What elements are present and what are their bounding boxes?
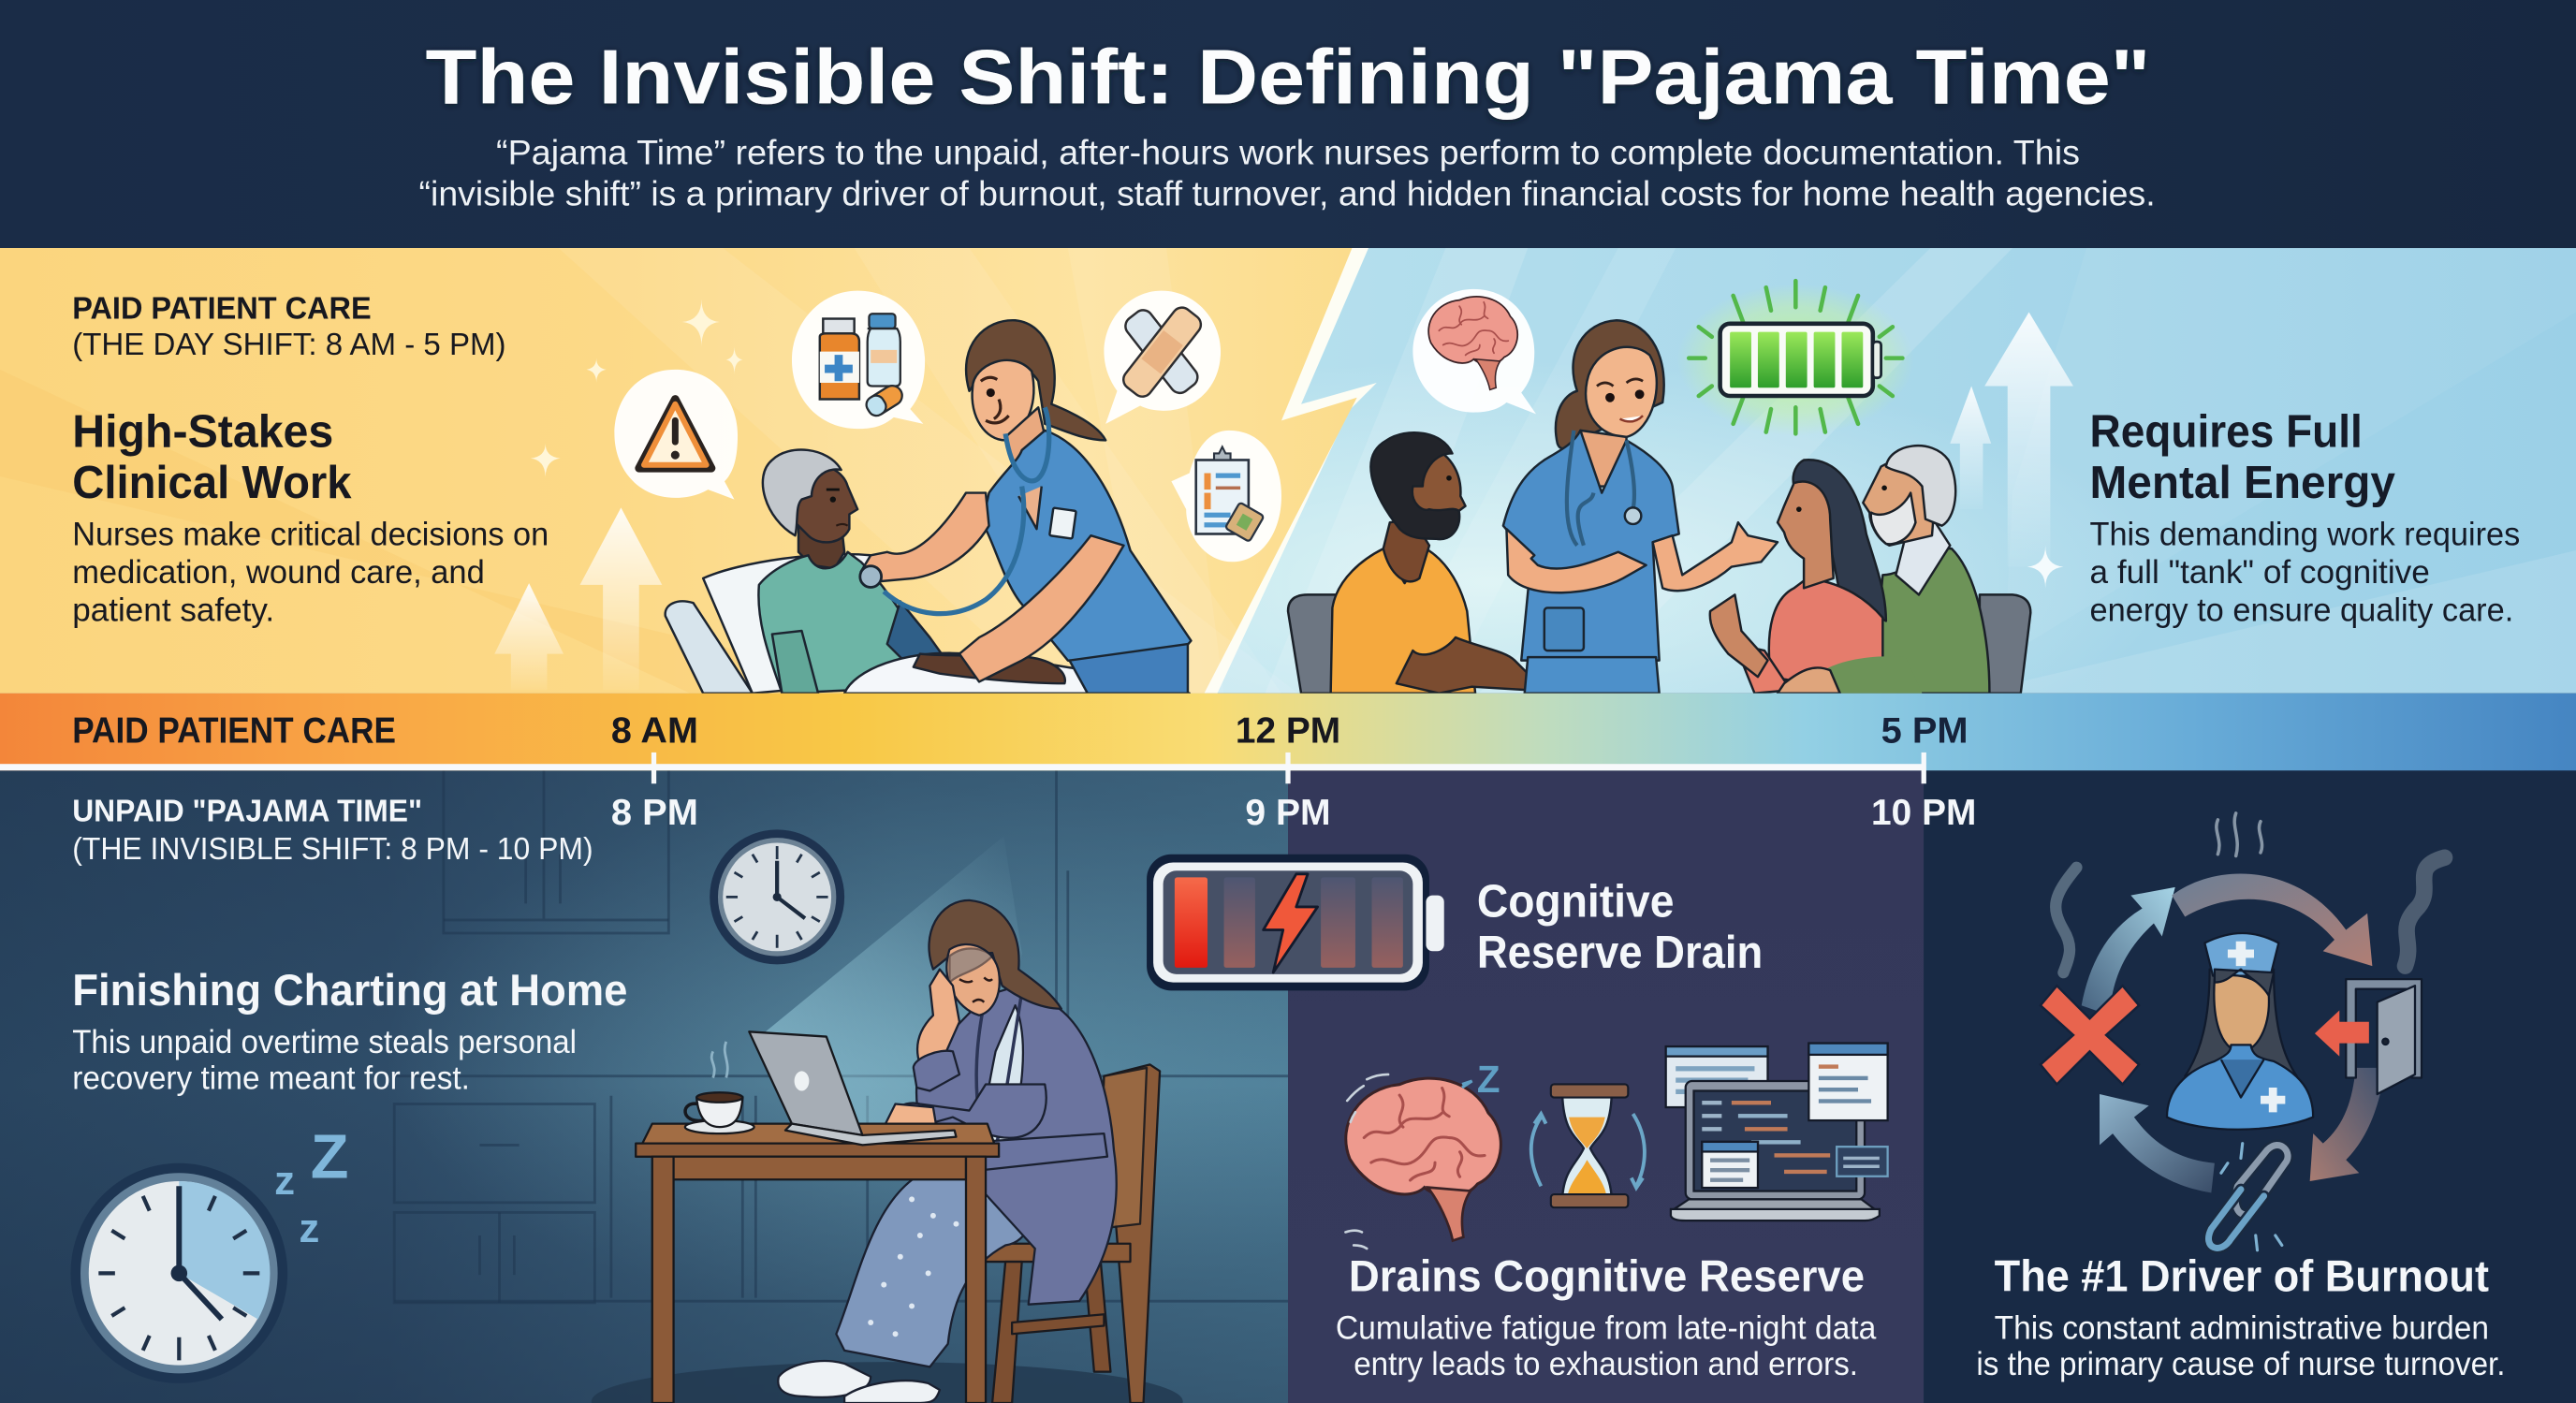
icon: sparkle on blue xyxy=(2027,546,2063,588)
text: high-stakes clinical work: medication, wound care, and xyxy=(72,554,485,591)
text: high-stakes clinical work: Clinical Work xyxy=(72,458,352,508)
text: the number one driver of burnout xyxy=(1976,1252,2506,1382)
timeline labels: night times: 8 PM xyxy=(611,793,698,833)
header panel xyxy=(0,0,2576,248)
text: paid patient care heading: (THE DAY SHIFT: 8 AM - 5 PM) xyxy=(72,328,506,362)
icon: tired brain xyxy=(1345,1058,1500,1249)
text: unpaid pajama time heading xyxy=(72,795,593,867)
text: requires full mental energy: This demanding work requires xyxy=(2089,517,2520,553)
text: requires full mental energy xyxy=(2089,406,2520,628)
text: unpaid pajama time heading: UNPAID "PAJAMA TIME" xyxy=(72,795,422,829)
icon: broken chain xyxy=(2208,1144,2288,1250)
text: high-stakes clinical work: Nurses make critical decisions on xyxy=(72,517,549,553)
icon: full battery with rays xyxy=(1677,281,1914,435)
icon: zzz xyxy=(274,1123,348,1251)
panel: day shift background blue xyxy=(0,248,2576,694)
text: requires full mental energy: a full "tank" of cognitive xyxy=(2089,554,2430,591)
text: paid patient care heading xyxy=(72,292,506,362)
icon: laptop with charting windows xyxy=(1666,1044,1888,1220)
text: cognitive reserve drain xyxy=(1477,876,1763,978)
text: the number one driver of burnout: is the primary cause of nurse turnover. xyxy=(1976,1346,2506,1382)
text: cognitive reserve drain: Reserve Drain xyxy=(1477,928,1763,978)
text: requires full mental energy: Mental Energy xyxy=(2089,458,2396,508)
subtitle xyxy=(419,134,2156,212)
icon: bandage bubble xyxy=(1104,291,1221,424)
icon: sparkles on yellow xyxy=(531,299,742,478)
icon: warning bubble xyxy=(614,370,738,500)
icon: wall clock xyxy=(710,829,844,964)
panel: home night scene xyxy=(0,766,1288,1403)
title: The Invisible Shift: Defining "Pajama Time" xyxy=(426,35,2150,121)
text: the number one driver of burnout: The #1 Driver of Burnout xyxy=(1995,1252,2489,1302)
text: high-stakes clinical work xyxy=(72,406,549,628)
icon: nurse with cap xyxy=(2167,933,2313,1130)
text: drains cognitive reserve: Cumulative fatigue from late-night data xyxy=(1336,1310,1877,1347)
text: finishing charting at home: Finishing Charting at Home xyxy=(72,966,627,1016)
text: cognitive reserve drain: Cognitive xyxy=(1477,876,1674,927)
timeline labels: night times: 9 PM xyxy=(1245,793,1331,833)
text: requires full mental energy: Requires Full xyxy=(2089,406,2363,457)
illustration: nurse speaking xyxy=(1503,320,1778,694)
timeline bar: 8 AM xyxy=(611,710,698,751)
text: unpaid pajama time heading: (THE INVISIBLE SHIFT: 8 PM - 10 PM) xyxy=(72,832,593,867)
timeline bar xyxy=(0,694,2576,783)
timeline bar: 5 PM xyxy=(1881,710,1969,751)
text: finishing charting at home: recovery time meant for rest. xyxy=(72,1060,470,1097)
icon: up arrows on yellow xyxy=(494,507,662,690)
icon: sleep clock xyxy=(70,1163,287,1383)
timeline bar: PAID PATIENT CARE xyxy=(72,710,396,751)
text: high-stakes clinical work: patient safety. xyxy=(72,592,274,628)
illustration: laptop light cone xyxy=(766,836,1022,1133)
illustration: woman at laptop in robe xyxy=(778,900,1117,1403)
icon: tired brain: Z xyxy=(1477,1058,1500,1101)
subtitle: “invisible shift” is a primary driver of burnout, staff turnover, and hidden financial costs for home health agencies. xyxy=(419,174,2156,212)
text: paid patient care heading: PAID PATIENT CARE xyxy=(72,292,372,327)
text: drains cognitive reserve: Drains Cognitive Reserve xyxy=(1349,1252,1865,1302)
icon: red x xyxy=(2041,986,2139,1084)
text: requires full mental energy: energy to ensure quality care. xyxy=(2089,592,2513,628)
text: the number one driver of burnout: This constant administrative burden xyxy=(1995,1310,2489,1347)
timeline bar: 12 PM xyxy=(1236,710,1340,751)
icon: clipboard bubble xyxy=(1171,431,1281,562)
panel: burnout right column xyxy=(1924,766,2576,1403)
icon: low battery xyxy=(1147,855,1444,990)
icon: zzz: Z xyxy=(311,1123,348,1192)
illustration: wooden chair xyxy=(986,1064,1160,1403)
text: high-stakes clinical work: High-Stakes xyxy=(72,406,333,457)
timeline labels: night times: 10 PM xyxy=(1871,793,1976,833)
text: drains cognitive reserve xyxy=(1336,1252,1877,1382)
illustration: seated family couple xyxy=(1710,446,2030,694)
icon: burnout cycle arrows xyxy=(2082,873,2385,1192)
text: finishing charting at home: This unpaid overtime steals personal xyxy=(72,1024,577,1060)
text: finishing charting at home xyxy=(72,966,627,1097)
text: drains cognitive reserve: entry leads to exhaustion and errors. xyxy=(1354,1346,1858,1382)
illustration: hospital bed and patient xyxy=(666,450,1190,694)
illustration: table with laptop and coffee xyxy=(636,1031,999,1403)
icon: brain bubble xyxy=(1412,289,1536,414)
icon: zzz: z xyxy=(299,1206,319,1251)
illustration: seated man in yellow shirt xyxy=(1288,432,1534,694)
subtitle: “Pajama Time” refers to the unpaid, after-hours work nurses perform to complete documentation. This xyxy=(496,134,2080,172)
icon: hourglass xyxy=(1531,1084,1645,1207)
icon: exit door with red arrow xyxy=(2315,979,2422,1094)
icon: zzz: z xyxy=(274,1158,295,1204)
panel: day shift background yellow with lightning edge xyxy=(0,248,1377,694)
icon: medication bubble xyxy=(792,291,925,429)
panel: cognitive reserve middle column xyxy=(1288,766,1924,1403)
icon: smoke xyxy=(2056,813,2445,972)
illustration: nurse with stethoscope xyxy=(860,320,1191,694)
timeline labels: night times xyxy=(611,793,1976,833)
icon: up arrows on blue xyxy=(1950,313,2073,567)
